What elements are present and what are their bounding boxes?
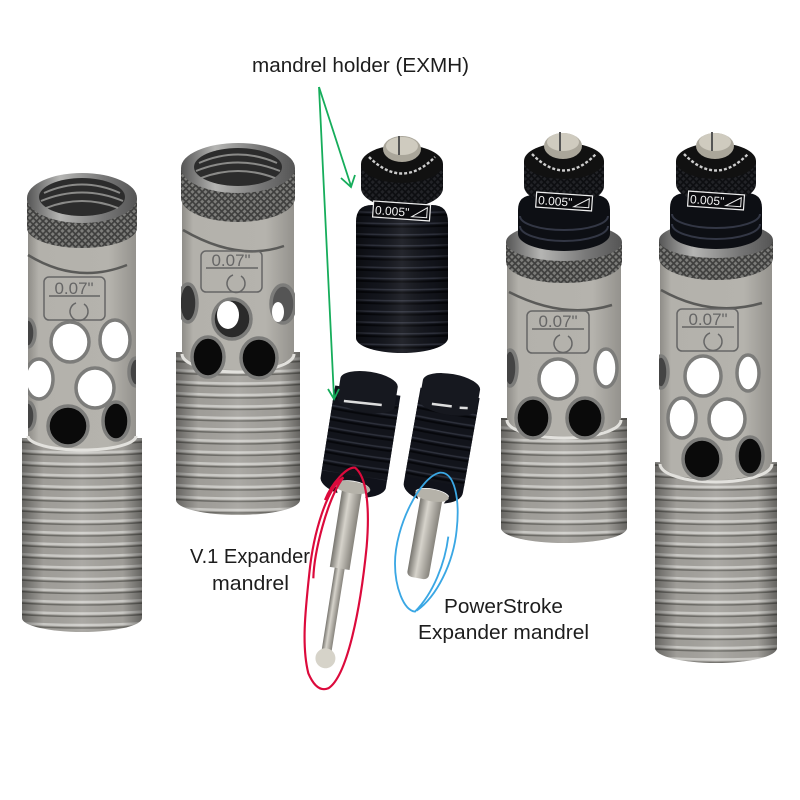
threaded section <box>176 352 300 515</box>
dial label: 0.07" <box>211 251 251 270</box>
label: V.1 Expander mandrel <box>190 546 310 595</box>
blue circle around PowerStroke mandrel <box>395 473 458 612</box>
dial label <box>677 309 738 351</box>
top opening <box>27 173 137 223</box>
holes <box>179 284 295 378</box>
knurled collar <box>181 168 295 222</box>
scale label <box>373 201 431 221</box>
dial label: 0.07" <box>688 310 728 329</box>
arrow to holder <box>319 87 355 187</box>
knurled collar <box>506 242 622 283</box>
threaded body <box>356 205 448 353</box>
dial label: 0.07" <box>538 312 578 331</box>
scale label: 0.005" <box>690 192 725 209</box>
scale label <box>536 192 593 211</box>
holder threads <box>518 195 610 251</box>
knurled knob <box>524 161 604 205</box>
label: PowerStroke Expander mandrel: Expander mandrel <box>418 622 589 644</box>
threaded section <box>501 418 627 543</box>
knob <box>336 367 399 417</box>
knurled knob <box>361 164 443 208</box>
top opening <box>181 143 295 193</box>
holes <box>654 355 763 479</box>
label: PowerStroke Expander mandrel <box>418 596 589 644</box>
green pointer arrows <box>319 87 355 399</box>
die 2: short open die body <box>176 143 300 515</box>
dial label: 0.07" <box>54 279 94 298</box>
holder body <box>319 385 400 500</box>
mandrel holder (EXMH) standalone <box>356 136 448 353</box>
PowerStroke expander mandrel <box>388 369 483 583</box>
arrow to mandrel <box>319 87 339 399</box>
scale label <box>688 191 744 210</box>
threaded section <box>655 462 777 663</box>
knob <box>418 369 482 420</box>
die 4: short die with mandrel holder installed <box>501 132 627 543</box>
mandrel pin <box>407 493 443 580</box>
red circle around V.1 mandrel <box>305 468 368 689</box>
perforated body <box>660 255 772 480</box>
perforated body <box>28 225 136 450</box>
die 5: tall die with mandrel holder installed <box>654 132 777 663</box>
heading: mandrel holder: mandrel holder (EXMH) <box>252 55 469 77</box>
holder threads <box>670 193 762 249</box>
dial label <box>44 277 105 320</box>
scale label: 0.005" <box>538 193 573 210</box>
dial label <box>527 311 589 353</box>
label: V.1 Expander mandrel: mandrel <box>212 573 289 595</box>
perforated body <box>182 190 294 370</box>
dial label <box>201 251 262 292</box>
threaded section <box>22 438 142 632</box>
V.1 expander mandrel <box>291 367 403 673</box>
perforated body <box>507 255 621 436</box>
knurled collar <box>659 240 773 280</box>
screw head <box>383 136 421 162</box>
screw head <box>544 132 582 159</box>
label: V.1 Expander mandrel: V.1 Expander <box>190 546 310 568</box>
scale label: 0.005" <box>375 203 410 219</box>
holder body <box>401 388 480 506</box>
mandrel pin <box>314 488 362 670</box>
label: PowerStroke Expander mandrel: PowerStroke <box>444 596 563 618</box>
die 1: tall open die body <box>21 173 143 632</box>
knurled knob <box>676 161 756 203</box>
knurled collar <box>27 198 137 248</box>
holes <box>503 349 617 438</box>
holes <box>21 319 143 446</box>
screw head <box>696 132 734 159</box>
